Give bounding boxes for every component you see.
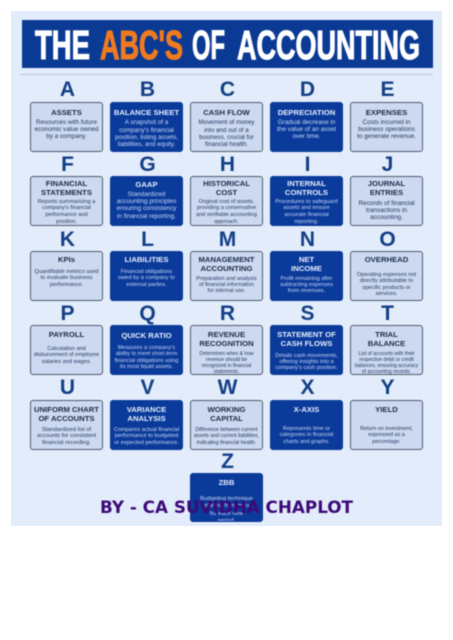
card: Statement of Cash Flows: Details cash movements, [275, 353, 338, 359]
card: Financial Statements: Reports summarizing a [38, 199, 95, 205]
card: Yield [350, 400, 423, 450]
card: Net Income: from revenues. [288, 288, 325, 294]
letter N: N [300, 228, 315, 251]
card: Yield: YIELD [375, 405, 398, 414]
card: Revenue Recognition: recognized in financial [202, 363, 251, 369]
card: Management Accounting: MANAGEMENT [199, 255, 254, 264]
card: Depreciation [270, 102, 343, 152]
letter X: X [300, 376, 314, 399]
letter B: B [140, 78, 155, 101]
card: Variance Analysis: performance to budgeted [115, 433, 178, 439]
card: Statement of Cash Flows: offering insights into a [279, 359, 334, 365]
card: Expenses: Costs incurred in [363, 119, 410, 126]
card: Working Capital: indicating financial health. [197, 440, 256, 446]
card: Statement of Cash Flows [270, 325, 343, 375]
card: Revenue Recognition [190, 325, 263, 375]
card: Yield: Return on investment, [360, 426, 413, 432]
card: Uniform Chart of Accounts: OF ACCOUNTS [38, 414, 95, 423]
letter V: V [140, 376, 154, 399]
card: Financial Statements: performance and [45, 212, 88, 218]
card: Historical Cost: COST [216, 188, 237, 197]
card: Yield: percentage. [372, 439, 401, 445]
card: KPIs [30, 251, 103, 301]
card: Variance Analysis [110, 400, 183, 450]
card: Balance Sheet: liabilities, and equity. [118, 141, 175, 148]
card: Financial Statements: STATEMENTS [41, 188, 92, 197]
card: Uniform Chart of Accounts: UNIFORM CHART [34, 405, 99, 414]
card: Cash Flow: into and out of a [204, 127, 249, 134]
card: Cash Flow: Movement of money [198, 119, 255, 126]
card: Quick Ratio [110, 325, 183, 375]
card: Journal Entries: Records of financial [358, 200, 415, 207]
card: Overhead: directly attributable to [360, 278, 413, 284]
card: Working Capital: WORKING [207, 405, 246, 414]
letter D: D [300, 78, 315, 101]
letter I: I [305, 153, 310, 176]
card: Journal Entries: accounting. [370, 214, 403, 221]
card: Uniform Chart of Accounts: financial recording. [42, 440, 91, 446]
card: Uniform Chart of Accounts: Standardized list of [42, 427, 91, 433]
footer credit: BY - CA SUVIDHA CHAPLOT [100, 498, 354, 517]
card: Internal Controls: reporting. [294, 219, 319, 225]
card: Trial Balance: respective debit or credit [359, 357, 414, 363]
card: Overhead: Operating expenses not [357, 272, 416, 278]
letter S: S [300, 302, 314, 325]
card: GAAP [110, 176, 183, 226]
card: GAAP: in financial reporting. [117, 213, 176, 220]
card: Cash Flow: business, crucial for [199, 134, 254, 141]
card: Expenses [350, 102, 423, 152]
card: Liabilities [110, 251, 183, 301]
letter T: T [381, 302, 394, 325]
card: Net Income: NET [299, 255, 314, 264]
card: Historical Cost: HISTORICAL [203, 179, 250, 188]
card: Management Accounting: of financial information [199, 282, 254, 288]
card: Depreciation: Gradual decrease in [278, 119, 335, 126]
card: X-Axis: categories in financial [280, 432, 333, 438]
card: Payroll: salaries and wages. [42, 359, 91, 365]
card: Net Income: subtracting expenses [280, 282, 333, 288]
card: Revenue Recognition: REVENUE [208, 330, 245, 339]
letter U: U [60, 376, 75, 399]
card: Balance Sheet: BALANCE SHEET [114, 108, 179, 116]
card: Management Accounting: Preparation and analysis [196, 276, 257, 282]
card: Journal Entries: ENTRIES [370, 188, 403, 197]
card: Historical Cost: approach. [214, 219, 239, 225]
card: ZBB: for each new [210, 511, 243, 517]
card: Journal Entries [350, 176, 423, 226]
title banner: ABC'S [100, 22, 183, 68]
card: GAAP: accounting principles [117, 198, 176, 205]
card: Management Accounting: ACCOUNTING [200, 264, 253, 273]
card: X-Axis [270, 400, 343, 450]
card: Payroll: disbursement of employee [34, 352, 99, 358]
card: Revenue Recognition: RECOGNITION [199, 339, 254, 348]
card: Net Income [270, 251, 343, 301]
card: Revenue Recognition: statements. [214, 369, 239, 375]
letter A: A [60, 78, 75, 101]
card: Internal Controls: INTERNAL [287, 179, 326, 188]
card: Internal Controls: accurate financial [284, 212, 329, 218]
card: Payroll: Calculation and [47, 346, 86, 352]
letter K: K [60, 228, 75, 251]
card: Liabilities: external parties. [126, 282, 167, 288]
card: Trial Balance: of accounting records. [362, 369, 411, 375]
card: GAAP: Standardized [128, 191, 165, 198]
card: Quick Ratio: QUICK RATIO [121, 331, 172, 340]
card: Balance Sheet: company's financial [119, 127, 174, 134]
letter F: F [61, 153, 74, 176]
letter J: J [382, 153, 393, 176]
card: ZBB [190, 473, 263, 522]
letter L: L [141, 228, 154, 251]
letter W: W [218, 376, 237, 399]
card: GAAP: GAAP [135, 180, 158, 189]
card: Working Capital: Difference between current [195, 427, 258, 433]
letter C: C [220, 78, 235, 101]
card: ZBB: ZBB [219, 478, 234, 487]
card: Historical Cost: and verifiable accounting [196, 212, 257, 218]
card: Trial Balance: TRIAL [375, 330, 398, 339]
card: Working Capital: assets and current liabilities, [194, 433, 259, 439]
card: Historical Cost: Original cost of assets, [199, 199, 254, 205]
letter E: E [380, 78, 394, 101]
card: Trial Balance [350, 325, 423, 375]
card: GAAP: ensuring consistency [117, 205, 176, 212]
card: Quick Ratio: its most liquid assets. [120, 364, 173, 370]
card: Quick Ratio: financial obligations using [115, 358, 178, 364]
card: Depreciation: the value of an asset [277, 126, 336, 133]
card: Expenses: EXPENSES [366, 108, 407, 116]
card: Cash Flow: financial health. [205, 141, 248, 148]
card: Journal Entries: transactions in [366, 207, 407, 214]
title banner: OF [192, 22, 225, 68]
card: Trial Balance: List of accounts with their [358, 351, 415, 357]
card: Assets [30, 102, 103, 152]
card: Expenses: to generate revenue. [357, 133, 416, 140]
card: Liabilities: Financial obligations [121, 269, 172, 275]
card: Variance Analysis: Compares actual financial [114, 427, 179, 433]
card: KPIs: KPIs [58, 255, 75, 264]
card: Management Accounting: for internal use. [208, 288, 245, 294]
card: Payroll: PAYROLL [49, 330, 84, 339]
letter P: P [60, 302, 74, 325]
card: Net Income: Profit remaining after [281, 276, 332, 282]
card: Overhead: specific products or [362, 285, 411, 291]
card: Uniform Chart of Accounts [30, 400, 103, 450]
letter M: M [219, 228, 236, 251]
card: Assets: by a company. [46, 133, 87, 140]
card: Assets: Resources with future [36, 119, 97, 126]
card: Internal Controls: Procedures to safeguard [275, 199, 338, 205]
card: Cash Flow [190, 102, 263, 152]
card: Balance Sheet: position, listing assets, [115, 134, 178, 141]
card: Liabilities: LIABILITIES [124, 255, 168, 264]
card: Overhead: services. [375, 291, 398, 297]
card: Financial Statements: FINANCIAL [46, 179, 87, 188]
card: Revenue Recognition: revenue should be [206, 357, 247, 363]
letter Q: Q [139, 302, 156, 325]
card: Quick Ratio: ability to meet short-term [116, 351, 177, 357]
card: Working Capital: CAPITAL [210, 414, 243, 423]
card: ZBB: starting from zero [204, 503, 249, 509]
card: X-Axis: Represents time or [283, 426, 330, 432]
card: Statement of Cash Flows: CASH FLOWS [281, 339, 332, 348]
card: Overhead: OVERHEAD [365, 255, 408, 264]
card: Uniform Chart of Accounts: accounts for consistent [37, 433, 96, 439]
card: Variance Analysis: VARIANCE [127, 405, 166, 414]
card: Variance Analysis: or expected performance. [114, 440, 179, 446]
card: Net Income: INCOME [291, 264, 322, 273]
card: Statement of Cash Flows: company's cash position. [275, 365, 338, 371]
card: KPIs: performance. [50, 282, 83, 288]
card: Overhead [350, 251, 423, 301]
letter Y: Y [380, 376, 394, 399]
card: Balance Sheet [110, 102, 183, 152]
card: Financial Statements: company's financial [42, 205, 91, 211]
card: Revenue Recognition: Determines when & how [199, 351, 254, 357]
card: Assets: economic value owned [34, 126, 99, 133]
card: Payroll [30, 325, 103, 375]
card: Management Accounting [190, 251, 263, 301]
card: Assets: ASSETS [51, 108, 82, 116]
letter H: H [220, 153, 235, 176]
card: Depreciation: over time. [292, 133, 321, 140]
card: ZBB: Budgeting technique [200, 496, 253, 502]
card: Trial Balance: BALANCE [368, 339, 405, 348]
card: X-Axis: charts and graphs. [283, 439, 330, 445]
card: Internal Controls: CONTROLS [285, 188, 328, 197]
letter G: G [139, 153, 156, 176]
background panel [11, 11, 442, 526]
card: Balance Sheet: A snapshot of a [125, 119, 168, 126]
title banner: THE [35, 22, 90, 68]
card: Historical Cost [190, 176, 263, 226]
card: KPIs: to evaluate business [41, 275, 92, 281]
card: Expenses: business operations [358, 126, 415, 133]
card: Quick Ratio: Measures a company's [118, 345, 175, 351]
card: Yield: expressed as a [368, 432, 405, 438]
card: Historical Cost: providing a conservative [197, 205, 256, 211]
card: Working Capital [190, 400, 263, 450]
card: Liabilities: owed by a company to [118, 275, 175, 281]
letter Z: Z [221, 450, 234, 473]
card: Financial Statements: position. [56, 219, 77, 225]
card: Statement of Cash Flows: STATEMENT OF [277, 330, 336, 339]
letter R: R [220, 302, 235, 325]
letter O: O [379, 228, 396, 251]
card: Journal Entries: JOURNAL [368, 179, 405, 188]
title banner [21, 19, 434, 69]
card: Financial Statements [30, 176, 103, 226]
card: Depreciation: DEPRECIATION [278, 108, 335, 116]
card: X-Axis: X-AXIS [294, 405, 319, 414]
card: Internal Controls: assets and ensure [283, 205, 330, 211]
card: Variance Analysis: ANALYSIS [127, 414, 166, 423]
card: KPIs: Quantifiable metrics used [34, 269, 99, 275]
card: Cash Flow: CASH FLOW [203, 108, 250, 116]
card: Internal Controls [270, 176, 343, 226]
card: Trial Balance: balances, ensuring accuracy [355, 363, 418, 369]
